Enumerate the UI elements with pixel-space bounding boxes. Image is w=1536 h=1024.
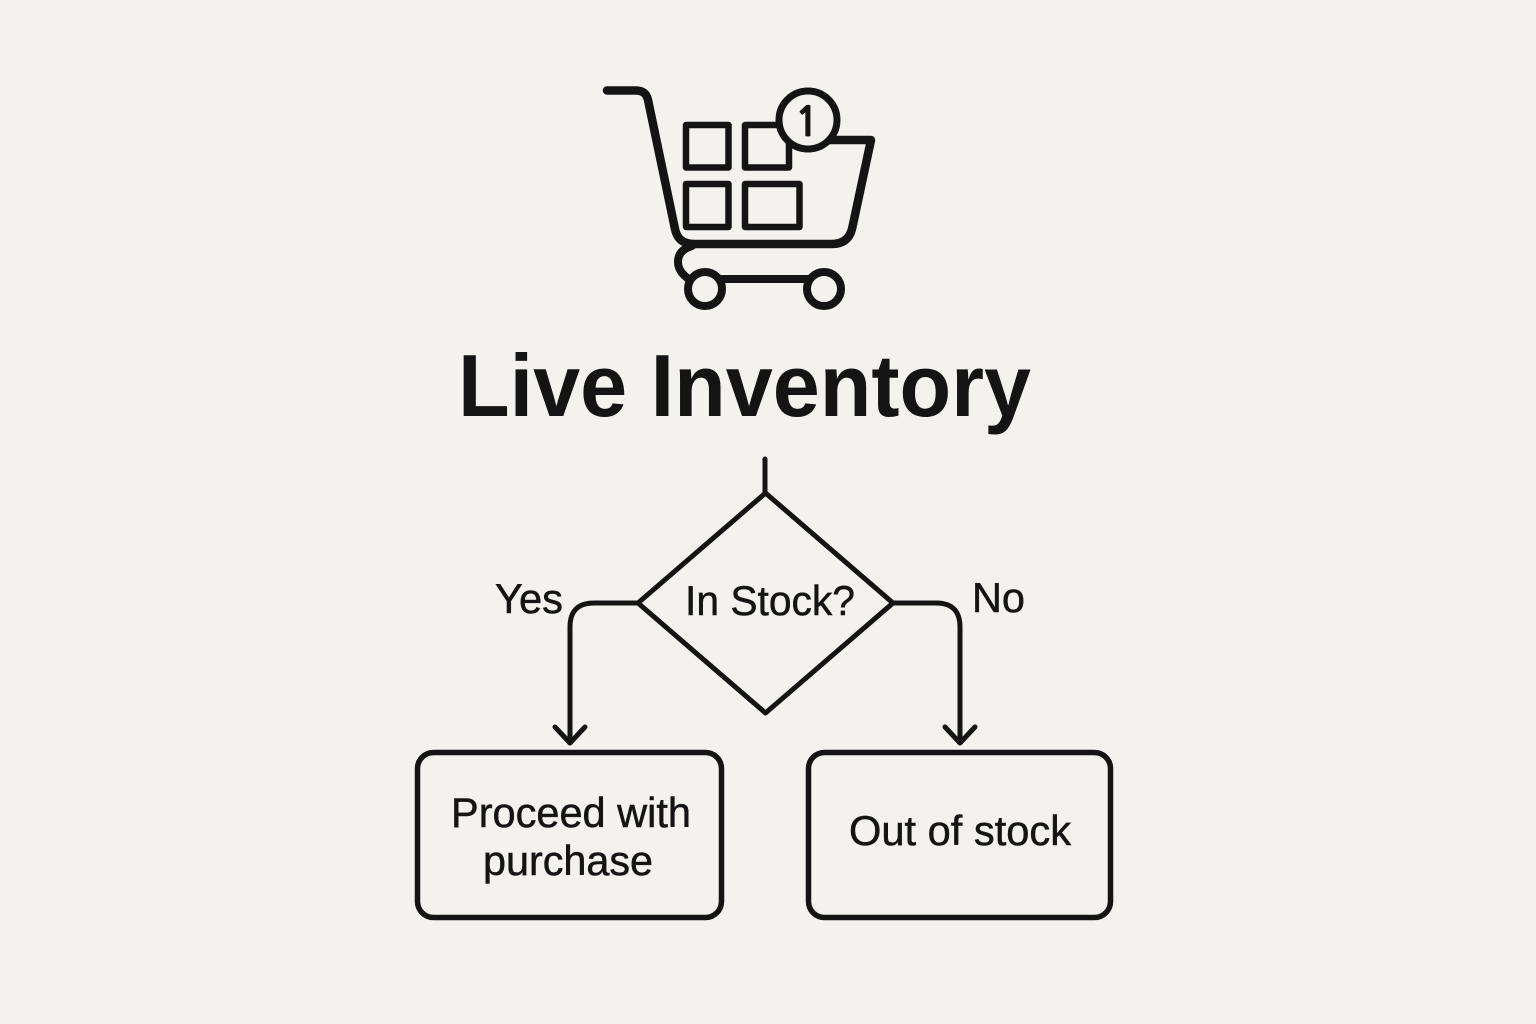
cart lower loop and axle (678, 246, 808, 280)
badge circle (779, 91, 837, 149)
label: yes: Yes (495, 575, 563, 622)
box text line 1: Proceed with (451, 789, 691, 836)
wheel: right (807, 272, 841, 306)
decision label: In Stock? (685, 577, 855, 624)
cart body and handle (607, 90, 871, 244)
decision diamond (638, 493, 893, 713)
box text line 2: purchase (483, 837, 653, 884)
box: bottom left (686, 184, 728, 227)
box: top right (745, 125, 789, 168)
title: Live Inventory (458, 336, 1031, 435)
box text: Out of stock (849, 807, 1072, 854)
arrow: yes branch (555, 603, 638, 743)
arrow: no branch (893, 603, 975, 743)
box: proceed with purchase (418, 752, 722, 918)
box: bottom right (745, 184, 800, 227)
box: out of stock (808, 752, 1110, 918)
label: no: No (972, 574, 1025, 621)
badge number: 1 (795, 102, 819, 142)
wheel: left (688, 272, 722, 306)
connector: entry line (762, 459, 768, 494)
icon: shopping cart with badge (607, 90, 871, 306)
flowchart (418, 459, 1110, 918)
box: top left (686, 125, 728, 168)
